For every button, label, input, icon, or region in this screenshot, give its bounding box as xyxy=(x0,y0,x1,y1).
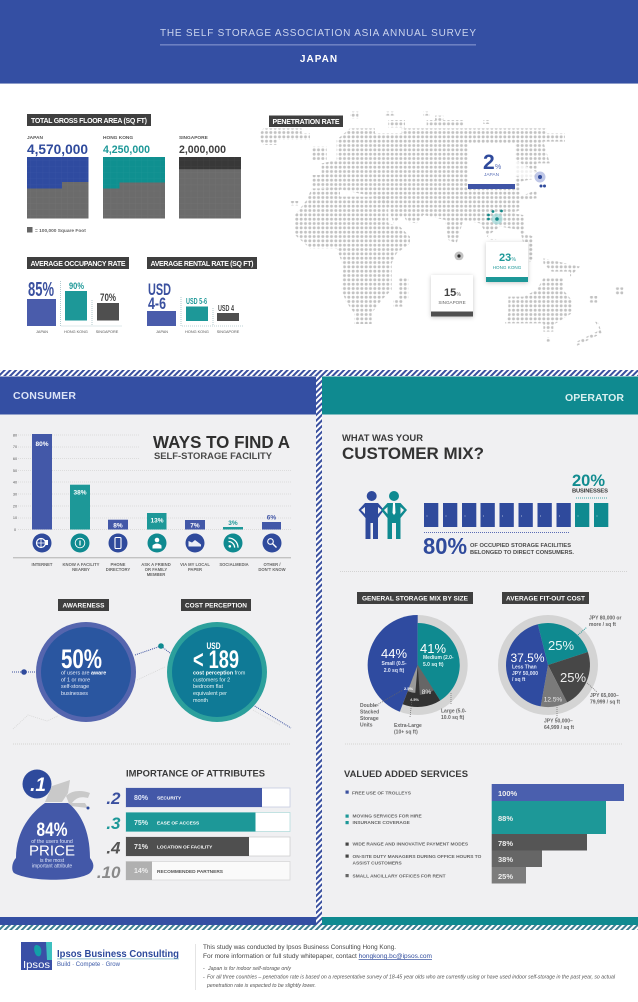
category labels: OR FAMILY xyxy=(145,567,167,572)
pie chart: storage mix by size: Extra-Large xyxy=(394,723,422,729)
company name xyxy=(57,948,179,968)
icon: search xyxy=(262,534,282,552)
stepped bars: 88% xyxy=(498,814,513,823)
callout: Singapore 15%: % xyxy=(456,292,462,298)
circle: cost perception: equivalent per xyxy=(193,691,227,697)
header banner: JAPAN xyxy=(300,54,338,65)
value: 80% consumers xyxy=(423,532,574,559)
bar: other 6%: 6% xyxy=(267,514,276,522)
service list: ON-SITE DUTY MANAGERS DURING OFFICE HOURS TO xyxy=(352,854,482,860)
y axis: 50 xyxy=(13,469,17,473)
bar: know a facility 38% xyxy=(70,485,90,530)
heading: average fit-out cost: AVERAGE FIT-OUT COST xyxy=(506,596,585,602)
circle: awareness 50%: 50% xyxy=(61,644,102,674)
value: 80% consumers: BELONGED TO DIRECT CONSUMERS. xyxy=(470,550,574,556)
bar: ease of access 75%: 75% xyxy=(134,820,149,827)
y axis: 30 xyxy=(13,492,17,496)
badge: rank 1: .1 xyxy=(30,775,46,796)
callout: Japan 2%: % xyxy=(495,164,501,171)
heading: general storage mix xyxy=(357,592,473,604)
pie chart: storage mix by size: 2.0 sq ft) xyxy=(384,668,405,674)
pie chart: fit-out cost: Less Than xyxy=(512,664,537,670)
header banner xyxy=(0,0,638,84)
value: 80% consumers: 80% xyxy=(423,533,467,559)
icon: globe xyxy=(32,534,52,552)
heading: penetration rate: PENETRATION RATE xyxy=(272,119,340,126)
company name: Build · Compete · Grow xyxy=(57,962,121,968)
bar: know a facility 38%: 38% xyxy=(73,490,87,496)
circle: awareness 50%: of users are aware xyxy=(61,670,106,676)
circle: cost perception xyxy=(167,622,267,722)
bar: Japan 85%: 85% xyxy=(28,279,54,301)
y axis: 0 xyxy=(14,528,16,532)
circle: awareness 50%: of 1 or more xyxy=(61,678,90,684)
marker: awareness dot xyxy=(21,669,27,675)
callout: Hong Kong 23%: % xyxy=(512,257,516,263)
bar: Japan USD 4-6: USD xyxy=(148,280,171,299)
pie chart: storage mix by size: 44% xyxy=(381,646,407,661)
axis labels: HONG KONG xyxy=(185,330,209,334)
panel: ways to find a facility xyxy=(13,432,292,577)
bar: location 71%: .4 xyxy=(106,838,121,858)
bar: security 80%: 80% xyxy=(134,795,149,802)
bar: location 71%: LOCATION OF FACILITY xyxy=(157,844,213,850)
title xyxy=(342,433,484,463)
icon: person xyxy=(148,534,166,552)
pie chart: fit-out cost: JPY 80,000 or xyxy=(589,616,621,622)
bar: Japan USD 4-6 xyxy=(147,280,176,326)
callout: Japan 2% xyxy=(468,143,546,189)
panel: valued added services xyxy=(344,769,624,884)
heading: general storage mix: GENERAL STORAGE MIX BY SIZE xyxy=(362,596,469,602)
column: Hong Kong floor area: 4,250,000 xyxy=(103,144,150,156)
pie chart: fit-out cost: 79,999 / sq ft xyxy=(590,700,620,706)
service list: SMALL ANCILLARY OFFICES FOR RENT xyxy=(352,874,446,880)
icon: money bag with 84% price xyxy=(12,780,93,880)
category labels: INTERNET xyxy=(32,562,53,567)
bar: Hong Kong USD 5-6: USD 5-6 xyxy=(186,297,207,306)
column: Singapore floor area xyxy=(179,135,241,218)
heading: cost perception xyxy=(181,599,251,611)
badge: rank 1 xyxy=(22,770,52,798)
icon: phone xyxy=(108,534,128,552)
heading: cost perception: COST PERCEPTION xyxy=(185,602,247,610)
column: Singapore floor area: 2,000,000 xyxy=(179,144,226,156)
axis labels xyxy=(156,330,240,334)
pie chart: storage mix by size: Small (0.5- xyxy=(381,661,407,667)
callout: Japan 2%: 2 xyxy=(483,151,495,174)
category labels: SOCIALMEDIA xyxy=(219,562,249,567)
pie chart: storage mix by size: 5.0 sq ft) xyxy=(423,662,444,668)
column: Singapore floor area: SINGAPORE xyxy=(179,135,209,141)
band: consumer xyxy=(0,376,316,414)
pie chart: fit-out cost: 25% xyxy=(548,638,574,653)
category labels xyxy=(32,562,286,577)
bar: ease of access 75%: EASE OF ACCESS xyxy=(157,820,200,826)
pie chart: storage mix by size: 41% xyxy=(420,641,446,656)
callout: Singapore 15% xyxy=(431,252,473,316)
panel: average occupancy rate xyxy=(27,257,129,334)
title: CUSTOMER MIX? xyxy=(342,444,484,463)
door icons xyxy=(424,503,608,527)
panel: penetration rate map xyxy=(260,112,623,346)
value: 20% businesses: 20% xyxy=(572,471,605,490)
pie chart: fit-out cost: 64,999 / sq ft xyxy=(544,725,574,731)
heading: occupancy: AVERAGE OCCUPANCY RATE xyxy=(30,261,126,268)
stepped bars xyxy=(492,784,624,884)
service list xyxy=(346,790,482,880)
dotted world map xyxy=(260,112,623,346)
pie chart: fit-out cost: JPY 50,000 xyxy=(512,671,538,677)
title: IMPORTANCE OF ATTRIBUTES xyxy=(126,768,265,778)
service list: ASSIST CUSTOMERS xyxy=(352,860,403,866)
panel: average rental rate xyxy=(147,257,257,334)
title: VALUED ADDED SERVICES xyxy=(344,769,468,780)
pie chart: storage mix by size: Medium (2.0- xyxy=(423,655,454,661)
pie chart: fit-out cost xyxy=(498,615,621,731)
service list: MOVING SERVICES FOR HIRE xyxy=(352,814,423,820)
heading: awareness xyxy=(58,599,109,611)
column: Japan floor area: 4,570,000 xyxy=(27,141,88,157)
column: Hong Kong floor area xyxy=(103,135,165,218)
circle: awareness 50% xyxy=(36,622,136,722)
category labels: PHONE xyxy=(111,562,126,567)
y axis: 80 xyxy=(13,434,17,438)
bar: security 80% xyxy=(106,788,290,808)
study note: For more information or full study whitepaper, contact hongkong.bc@ipsos.com xyxy=(203,953,432,960)
callout: Singapore 15%: 15 xyxy=(444,287,456,299)
bar: Singapore USD 4: USD 4 xyxy=(218,304,234,313)
heading: awareness: AWARENESS xyxy=(62,602,105,610)
icon: money bag with 84% price: is the most xyxy=(40,858,65,864)
value: 80% consumers: OF OCCUPIED STORAGE FACILITIES xyxy=(470,543,571,549)
footer xyxy=(21,942,616,990)
bar: local paper 7% xyxy=(185,520,205,530)
bar: other 6% xyxy=(262,514,281,530)
title: WAYS TO FIND A xyxy=(153,432,290,452)
band: operator: OPERATOR xyxy=(565,392,624,404)
column: Japan floor area: JAPAN xyxy=(27,135,43,141)
bar: ease of access 75% xyxy=(106,812,290,833)
y axis: 60 xyxy=(13,457,17,461)
column: Japan floor area xyxy=(27,135,88,218)
study note: This study was conducted by Ipsos Business Consulting Hong Kong. xyxy=(203,944,396,951)
band: consumer: CONSUMER xyxy=(13,390,76,402)
footnotes: - xyxy=(203,974,205,980)
stepped bars: 78% xyxy=(498,839,513,848)
stepped bars: 100% xyxy=(498,789,518,798)
pie chart: fit-out cost: 37.5% xyxy=(510,651,545,665)
pie chart: fit-out cost: 12.5% xyxy=(544,696,562,704)
axis labels xyxy=(36,330,119,334)
ipsos logo: Ipsos xyxy=(23,960,50,971)
pie chart: fit-out cost: JPY 50,000– xyxy=(544,718,573,724)
heading: total gross floor area xyxy=(27,114,151,126)
bar: internet 80%: 80% xyxy=(35,441,49,448)
icon: two people xyxy=(358,491,407,539)
circle: awareness 50%: self-storage xyxy=(61,684,89,690)
bar: security 80%: .2 xyxy=(106,789,121,808)
icon: money bag with 84% price: 84% xyxy=(36,820,68,841)
legend xyxy=(27,227,86,234)
circle: awareness 50%: businesses xyxy=(61,691,88,697)
circle: cost perception: customers for 2 xyxy=(193,678,230,684)
bar: friend or family 13%: 13% xyxy=(150,518,164,524)
axis labels: SINGAPORE xyxy=(217,330,240,334)
pie chart: storage mix by size: Double- xyxy=(360,703,379,709)
pie chart: fit-out cost: / sq ft xyxy=(512,677,526,683)
callout: Hong Kong 23% xyxy=(486,210,528,282)
pie chart: storage mix by size: 2.5% xyxy=(404,686,413,691)
bar: Singapore 70%: 70% xyxy=(100,292,116,304)
title: WHAT WAS YOUR xyxy=(342,433,424,443)
title: SELF-STORAGE FACILITY xyxy=(154,451,273,462)
axis labels: JAPAN xyxy=(156,330,168,334)
category labels: MEMBER xyxy=(147,572,165,577)
footnotes: penetration rate is expected to be slightly lower. xyxy=(206,983,316,989)
value: 20% businesses xyxy=(572,471,608,498)
callout: Hong Kong 23%: HONG KONG xyxy=(493,265,522,270)
heading: average fit-out cost xyxy=(502,592,589,604)
bar: Japan USD 4-6: 4-6 xyxy=(148,294,166,313)
category labels: DIRECTORY xyxy=(106,567,130,572)
bar: recommended partners 14% xyxy=(97,862,290,882)
band: operator xyxy=(322,376,638,414)
company name: Ipsos Business Consulting xyxy=(57,948,179,960)
y axis: 20 xyxy=(13,504,17,508)
ipsos logo xyxy=(21,942,52,971)
service list: INSURANCE COVERAGE xyxy=(352,820,411,826)
bar: recommended partners 14%: .10 xyxy=(97,863,121,882)
pie chart: storage mix by size: Stacked xyxy=(360,710,379,716)
footnotes: - xyxy=(203,966,205,972)
footnotes: Japan is for indoor self-storage only xyxy=(207,966,292,972)
stepped bars: 25% xyxy=(498,872,513,881)
pie chart: storage mix by size: 4.5% xyxy=(410,698,419,702)
pie chart: storage mix by size: Units xyxy=(360,722,373,728)
callout: Singapore 15%: SINGAPORE xyxy=(438,300,466,305)
column: Hong Kong floor area: HONG KONG xyxy=(103,135,133,141)
heading: total gross floor area: TOTAL GROSS FLOOR AREA (SQ FT) xyxy=(31,118,147,125)
icon: rss xyxy=(224,534,242,552)
panel: total gross floor area xyxy=(27,114,241,234)
bar: recommended partners 14%: 14% xyxy=(134,868,149,875)
callout: Hong Kong 23%: 23 xyxy=(499,252,511,264)
study note xyxy=(203,944,432,960)
footnotes: For all three countries – penetration rate is based on a representative survey of 18-45 year olds who are currently using or have used indoor self-storage in the past year, so actual xyxy=(207,974,616,980)
y axis xyxy=(13,434,17,532)
category labels: ASK A FRIEND xyxy=(141,562,171,567)
marker: cost dot xyxy=(158,643,164,649)
bar: local paper 7%: 7% xyxy=(190,522,200,530)
category labels: PAPER xyxy=(188,567,202,572)
heading: rental: AVERAGE RENTAL RATE (SQ FT) xyxy=(150,261,254,268)
bar: Hong Kong 90%: 90% xyxy=(69,281,84,292)
title xyxy=(153,432,290,462)
pie chart: fit-out cost: JPY 65,000– xyxy=(590,693,619,699)
pie chart: storage mix by size: Storage xyxy=(360,716,379,722)
category labels: KNOW A FACILITY xyxy=(63,562,100,567)
bar: ease of access 75%: .3 xyxy=(106,814,121,833)
axis labels: HONG KONG xyxy=(64,330,88,334)
value: 20% businesses: BUSINESSES xyxy=(572,488,608,494)
panel: importance of attributes xyxy=(12,768,290,882)
bar: phone directory 8% xyxy=(108,520,128,530)
y axis: 10 xyxy=(13,516,17,520)
category labels: DON'T KNOW xyxy=(258,567,286,572)
header banner: THE SELF STORAGE ASSOCIATION ASIA ANNUAL SURVEY xyxy=(160,28,476,39)
heading: penetration rate xyxy=(269,116,343,127)
axis labels: SINGAPORE xyxy=(96,330,119,334)
service list: FREE USE OF TROLLEYS xyxy=(352,790,412,796)
service list: WIDE RANGE AND INNOVATIVE PAYMENT MODES xyxy=(352,842,469,848)
icon: money bag with 84% price: of the users found xyxy=(31,839,73,845)
bar: social media 3% xyxy=(223,520,243,530)
circle: cost perception: < 189 xyxy=(193,646,239,674)
y axis: 40 xyxy=(13,480,17,484)
icon: money bag with 84% price: PRICE xyxy=(29,842,75,860)
bar: internet 80% xyxy=(32,434,52,530)
category labels: OTHER / xyxy=(264,562,281,567)
bar: location 71% xyxy=(106,837,290,858)
axis labels: JAPAN xyxy=(36,330,48,334)
bar: security 80%: SECURITY xyxy=(157,796,182,802)
footnotes xyxy=(203,966,616,989)
stepped bars: 38% xyxy=(498,855,513,864)
panel: awareness and cost perception xyxy=(12,599,291,729)
circle: cost perception: bedroom flat xyxy=(193,684,223,690)
circle: cost perception: USD xyxy=(206,641,221,651)
icon: shoe xyxy=(186,534,204,552)
bar: recommended partners 14%: RECOMMENDED PARTNERS xyxy=(157,869,224,875)
circle: cost perception: month xyxy=(193,698,208,704)
circle: cost perception: cost perception from xyxy=(193,670,246,676)
panel: customer mix xyxy=(342,433,608,559)
bar: friend or family 13% xyxy=(147,513,166,530)
icon: info xyxy=(70,534,90,552)
callout: Japan 2%: JAPAN xyxy=(484,172,500,178)
pie chart: storage mix by size: (10+ sq ft) xyxy=(394,730,418,736)
pie chart: storage mix by size xyxy=(360,615,468,736)
legend: = 100,000 Square Foot xyxy=(35,228,86,234)
pie chart: storage mix by size: 8% xyxy=(422,689,431,696)
pie chart: fit-out cost: 25% xyxy=(560,670,586,685)
pie chart: storage mix by size: 10.0 sq ft) xyxy=(441,715,465,721)
bar: social media 3%: 3% xyxy=(228,520,238,527)
category labels: NEARBY xyxy=(72,567,90,572)
icon: money bag with 84% price: important attribute xyxy=(32,864,72,870)
category labels: VIA MY LOCAL xyxy=(180,562,210,567)
y axis: 70 xyxy=(13,445,17,449)
pie chart: storage mix by size: Large (5.0- xyxy=(441,708,467,714)
bar: phone directory 8%: 8% xyxy=(113,522,123,530)
pie chart: fit-out cost: more / sq ft xyxy=(589,622,616,628)
bar: location 71%: 71% xyxy=(134,844,149,851)
